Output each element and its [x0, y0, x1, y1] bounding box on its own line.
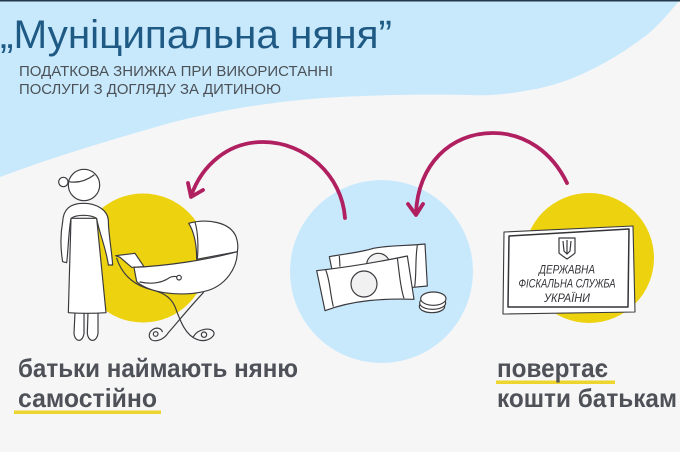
subtitle: [19, 63, 333, 98]
caption: right: повертає: [497, 353, 608, 383]
sign text: ФІСКАЛЬНА СЛУЖБА: [518, 276, 616, 290]
caption: left: [14, 353, 298, 414]
icon: banknotes and coins: [317, 244, 446, 313]
stroller: [116, 221, 238, 341]
coins: [419, 300, 445, 313]
background wave: [0, 0, 680, 177]
underline: left: [14, 410, 161, 414]
sign text: ДЕРЖАВНА: [537, 262, 595, 276]
subtitle: ПОДАТКОВА ЗНИЖКА ПРИ ВИКОРИСТАННІ: [19, 63, 333, 80]
sign text: [518, 262, 616, 305]
icon: trident shield: [559, 238, 575, 259]
sign text: УКРАЇНИ: [543, 291, 590, 305]
blue circle: centre: [290, 180, 473, 363]
caption: right: [496, 353, 677, 413]
caption: left: самостійно: [18, 383, 157, 413]
front banknote: [317, 256, 414, 311]
arrow: to parents: [188, 142, 345, 218]
woman: [59, 169, 113, 340]
back banknote: [329, 244, 427, 287]
subtitle: ПОСЛУГИ З ДОГЛЯДУ ЗА ДИТИНОЮ: [19, 81, 281, 98]
icon: woman with stroller: [59, 169, 238, 341]
yellow circle: left: [78, 194, 208, 322]
yellow circle: right: [524, 193, 654, 323]
underline: right: [496, 380, 615, 384]
title: „Муніципальна няня”: [0, 13, 392, 57]
icon: tax service sign: [503, 226, 635, 314]
caption: left: батьки наймають няню: [18, 353, 298, 383]
arrow: to money: [408, 133, 567, 215]
